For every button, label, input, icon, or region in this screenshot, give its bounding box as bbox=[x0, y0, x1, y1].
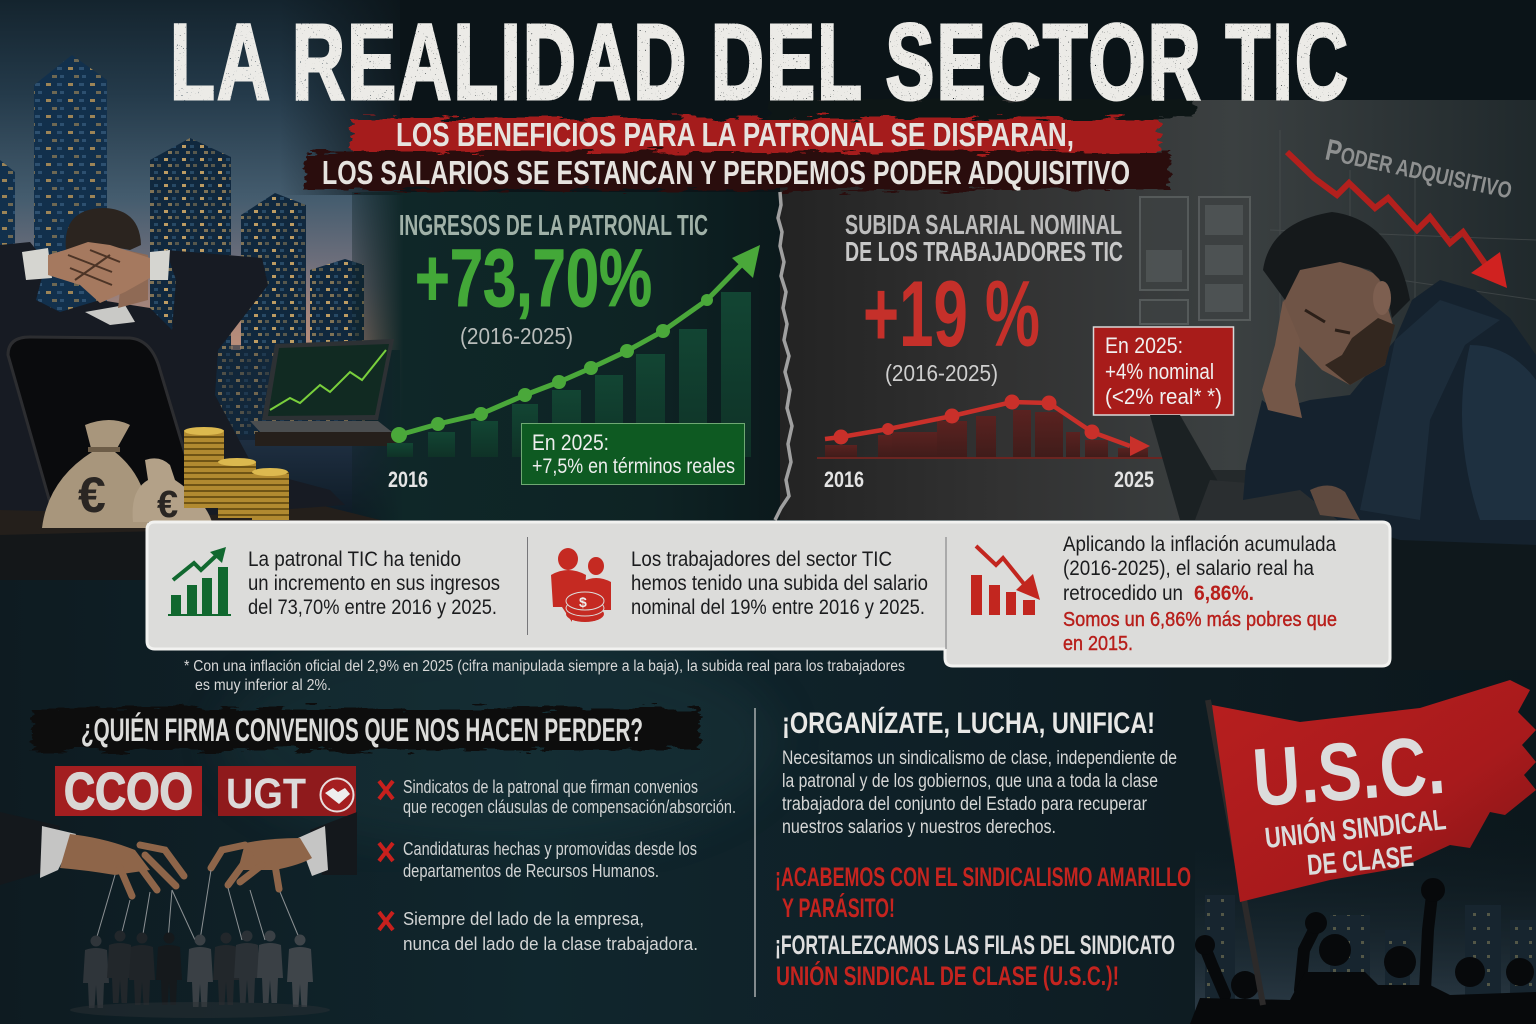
text: inflacion bbox=[1063, 533, 1337, 655]
hair bbox=[1263, 212, 1410, 318]
bullet 3: nunca del lado de la clase trabajadora. bbox=[403, 934, 698, 954]
heading band: quien firma: ¿QUIÉN FIRMA CONVENIOS QUE NOS HACEN PERDER? bbox=[81, 712, 643, 748]
text: trabajadores: hemos tenido una subida del salario bbox=[631, 572, 928, 595]
hoodie bbox=[1243, 280, 1536, 545]
illustration: worried worker bbox=[1150, 212, 1536, 545]
puppet figures bbox=[83, 930, 313, 1008]
callout: (<2% real* *) bbox=[1105, 384, 1222, 409]
flag text bbox=[1250, 720, 1448, 882]
red slogan: ¡ACABEMOS CON EL SINDICALISMO AMARILLO bbox=[775, 862, 1191, 892]
text: inflacion: en 2015. bbox=[1063, 633, 1133, 655]
laptop bbox=[250, 339, 394, 434]
illustration: red flag U.S.C. bbox=[1208, 680, 1536, 1005]
illustration: night city and crowd bbox=[1190, 820, 1536, 1024]
heading: SUBIDA SALARIAL NOMINAL bbox=[845, 209, 1122, 240]
subtitle: LOS SALARIOS SE ESTANCAN Y PERDEMOS PODER ADQUISITIVO bbox=[322, 154, 1130, 191]
footnote bbox=[184, 658, 905, 694]
text: patronal: un incremento en sus ingresos bbox=[248, 572, 500, 595]
logo: CCOO: CCOO bbox=[64, 763, 193, 821]
bullet 3 bbox=[379, 909, 698, 954]
text: inflacion: (2016-2025), el salario real ha bbox=[1063, 557, 1314, 580]
text: inflacion: Somos un 6,86% más pobres que bbox=[1063, 609, 1337, 631]
axis labels: 2016 bbox=[824, 467, 864, 492]
text: inflacion: Aplicando la inflación acumulada bbox=[1063, 533, 1336, 556]
heading bbox=[845, 209, 1123, 267]
footnote: * Con una inflación oficial del 2,9% en 2025 (cifra manipulada siempre a la baja), la subida real para los trabajadores bbox=[184, 658, 905, 675]
closing slogan: ¡FORTALEZCAMOS LAS FILAS DEL SINDICATO bbox=[775, 930, 1175, 960]
bullet 1: Sindicatos de la patronal que firman convenios bbox=[403, 777, 698, 797]
bar and line chart bbox=[387, 245, 760, 457]
panel: ingresos patronal bbox=[387, 210, 760, 492]
callout bbox=[522, 424, 744, 484]
paragraph: trabajadora del conjunto del Estado para recuperar bbox=[782, 794, 1148, 815]
axis labels: 2025 bbox=[1114, 467, 1154, 492]
panel: worker background bbox=[770, 98, 1536, 520]
illustration: businessman relaxing with money bbox=[0, 208, 400, 535]
left hand bbox=[0, 812, 184, 896]
text: patronal: del 73,70% entre 2016 y 2025. bbox=[248, 596, 497, 619]
paragraph: la patronal y de los gobiernos, que una a toda la clase bbox=[782, 771, 1158, 792]
big number: +19 % bbox=[863, 261, 1040, 366]
red slogan bbox=[775, 862, 1191, 923]
period: (2016-2025) bbox=[460, 323, 573, 349]
cuffs and hands bbox=[22, 242, 170, 303]
red slogan: Y PARÁSITO! bbox=[782, 892, 895, 923]
big number: +73,70% bbox=[415, 233, 652, 324]
callout: En 2025: bbox=[1105, 333, 1183, 358]
bullet 1 bbox=[379, 777, 736, 817]
right hand bbox=[211, 812, 357, 889]
desk bbox=[0, 500, 400, 535]
icon: workers and coins: $ bbox=[579, 594, 587, 610]
subtitle bbox=[305, 116, 1170, 191]
call to action text bbox=[775, 706, 1191, 991]
hand on table bbox=[1310, 485, 1360, 520]
chest on the left bbox=[0, 438, 64, 510]
axis labels bbox=[824, 467, 1154, 492]
heading: INGRESOS DE LA PATRONAL TIC bbox=[399, 210, 708, 242]
head bbox=[66, 208, 148, 308]
neck and face bbox=[1283, 255, 1393, 385]
closing slogan: UNIÓN SINDICAL DE CLASE (U.S.C.)! bbox=[776, 960, 1119, 991]
bullet 1: que recogen cláusulas de compensación/absorción. bbox=[403, 797, 736, 817]
heading band: quien firma bbox=[32, 708, 700, 750]
text: trabajadores bbox=[631, 548, 928, 619]
panel: patronal background bbox=[352, 192, 780, 520]
callout: +4% nominal bbox=[1105, 359, 1214, 384]
coin stacks bbox=[184, 427, 289, 520]
bullet 2: departamentos de Recursos Humanos. bbox=[403, 861, 659, 881]
text: trabajadores: nominal del 19% entre 2016 y 2025. bbox=[631, 596, 925, 619]
flag text: U.S.C. bbox=[1250, 720, 1448, 824]
hand and forearm bbox=[1262, 300, 1302, 418]
callout: +7,5% en términos reales bbox=[532, 455, 735, 478]
heading: DE LOS TRABAJADORES TIC bbox=[845, 236, 1123, 267]
icon: growth chart bbox=[168, 547, 231, 616]
laptop bbox=[1150, 415, 1240, 520]
list: critica a sindicatos bbox=[379, 777, 736, 954]
collar bbox=[85, 305, 135, 325]
icon: workers and coins bbox=[551, 548, 611, 622]
text: patronal bbox=[248, 548, 500, 619]
axis label: 2016 bbox=[388, 467, 428, 492]
period: (2016-2025) bbox=[885, 360, 998, 386]
bullet 2: Candidaturas hechas y promovidas desde los bbox=[403, 839, 697, 859]
flag text: DE CLASE bbox=[1306, 841, 1415, 882]
callout: En 2025: bbox=[532, 430, 609, 455]
summary card bbox=[147, 522, 1390, 666]
illustration: poder adquisitivo falling arrow bbox=[1287, 134, 1515, 288]
heading: ¡ORGANÍZATE, LUCHA, UNIFICA! bbox=[782, 706, 1155, 740]
logo: UGT: UGT bbox=[226, 770, 306, 818]
panel: lower background bbox=[0, 520, 1536, 1024]
line chart bbox=[817, 394, 1165, 458]
paragraph: nuestros salarios y nuestros derechos. bbox=[782, 817, 1056, 838]
strings bbox=[96, 870, 300, 940]
text: inflacion: retrocedido un bbox=[1063, 582, 1183, 605]
icon: falling chart bbox=[971, 546, 1040, 615]
paragraph bbox=[782, 748, 1177, 838]
bullet 3: Siempre del lado de la empresa, bbox=[403, 909, 644, 929]
jacket bbox=[0, 242, 345, 515]
panel: city skyline bbox=[0, 0, 1536, 520]
illustration: puppeteer hands and puppets bbox=[0, 812, 357, 1018]
paragraph: Necesitamos un sindicalismo de clase, independiente de bbox=[782, 748, 1177, 769]
money bags: € bbox=[78, 467, 106, 523]
subtitle: LOS BENEFICIOS PARA LA PATRONAL SE DISPARAN, bbox=[396, 116, 1074, 153]
footnote: es muy inferior al 2%. bbox=[195, 677, 331, 694]
callout bbox=[1094, 327, 1234, 415]
text: inflacion: 6,86%. bbox=[1194, 582, 1254, 605]
text: patronal: La patronal TIC ha tenido bbox=[248, 548, 461, 571]
logo: UGT bbox=[218, 766, 356, 818]
text: trabajadores: Los trabajadores del sector TIC bbox=[631, 548, 892, 571]
closing slogan bbox=[775, 930, 1175, 991]
flag text: UNIÓN SINDICAL bbox=[1263, 802, 1448, 855]
chair bbox=[8, 337, 205, 520]
torn divider bbox=[775, 192, 792, 520]
panel: subida salarial bbox=[817, 209, 1234, 492]
money bags bbox=[42, 420, 212, 528]
money bags: € bbox=[157, 484, 178, 526]
bullet 2 bbox=[379, 839, 697, 881]
